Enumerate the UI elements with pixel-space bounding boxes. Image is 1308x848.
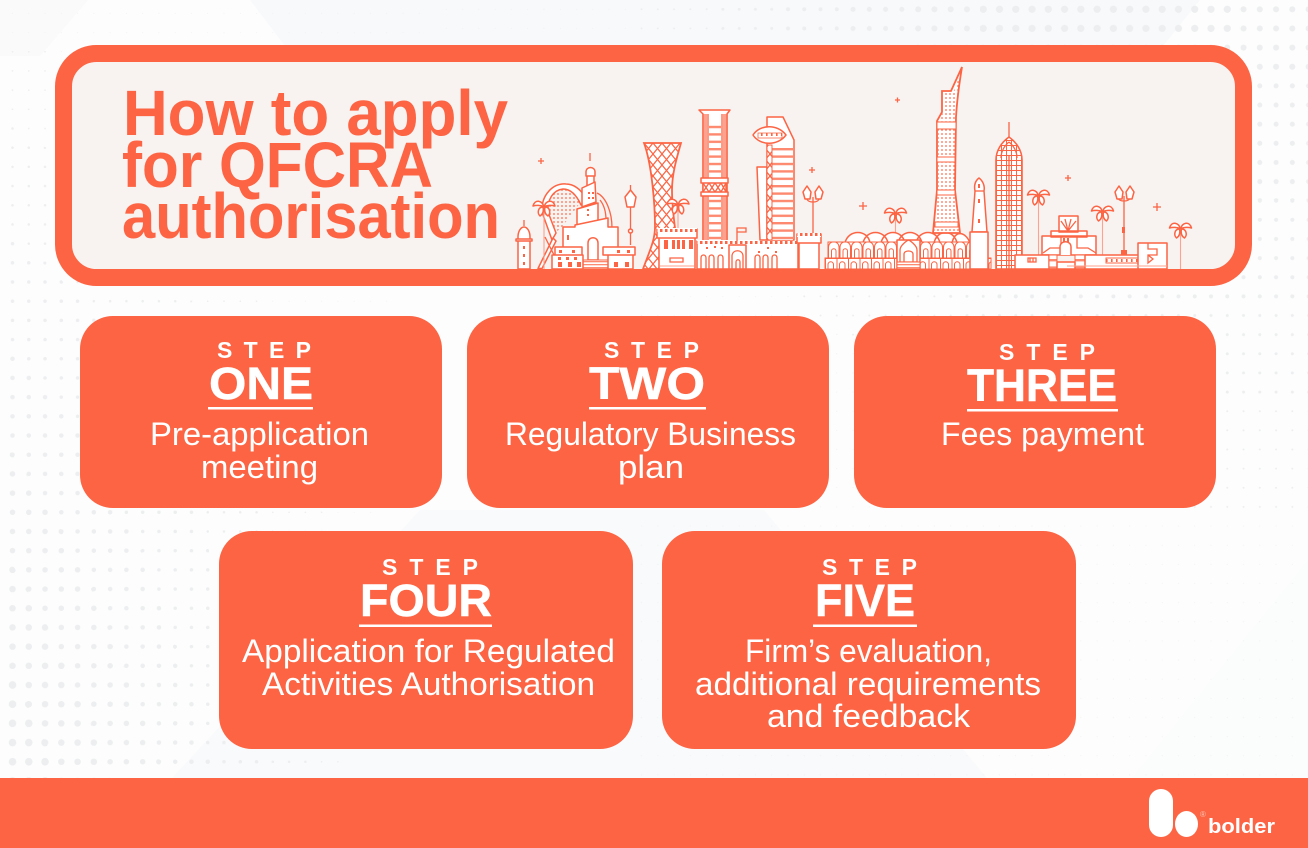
header panel — [64, 54, 1244, 278]
step label: STEP — [822, 554, 917, 580]
arch museum — [538, 184, 612, 268]
glass tower — [996, 122, 1022, 269]
description: meeting — [201, 449, 318, 485]
underline — [208, 407, 313, 410]
description: Regulatory Business — [505, 416, 796, 452]
underline — [813, 624, 917, 627]
step label: STEP — [382, 554, 478, 580]
palm over palace — [884, 208, 906, 233]
panel: step three — [854, 316, 1216, 508]
underline — [967, 409, 1118, 412]
panel: step two — [467, 316, 829, 508]
underline — [589, 407, 706, 410]
description: Pre-application — [150, 416, 369, 452]
step number: FIVE — [815, 575, 915, 626]
spiral minaret mosque — [552, 153, 635, 269]
title: How to apply — [123, 77, 508, 149]
description: Application for Regulated — [242, 633, 615, 669]
title: authorisation — [122, 180, 500, 252]
logo: bolder: ® — [1200, 810, 1206, 819]
palm by museum — [1092, 206, 1114, 255]
museum — [1015, 216, 1167, 269]
palm left — [533, 201, 555, 269]
description: additional requirements — [695, 666, 1041, 702]
logo: bolder — [1149, 789, 1275, 838]
panel: step one — [80, 316, 442, 508]
hotel tower with disc — [753, 117, 794, 240]
step number: TWO — [589, 358, 705, 409]
palm centre — [667, 199, 689, 229]
description — [505, 416, 796, 485]
step number: THREE — [967, 360, 1117, 411]
title — [122, 77, 508, 252]
street lamp 1 — [625, 185, 636, 245]
old minaret — [970, 178, 988, 269]
fort long wall — [697, 228, 798, 269]
street lamp 2 — [803, 186, 823, 234]
illustration: Doha skyline — [516, 67, 1192, 269]
logo: bolder: bolder — [1208, 816, 1275, 838]
footer bar — [0, 778, 1308, 848]
step number: ONE — [209, 358, 313, 409]
description — [695, 633, 1041, 734]
description — [242, 633, 615, 702]
palm far right — [1170, 223, 1192, 269]
palm right of glass tower — [1028, 190, 1050, 255]
step number: FOUR — [360, 575, 492, 626]
description: plan — [618, 449, 684, 485]
description — [150, 416, 369, 485]
lattice tower — [643, 143, 681, 269]
panel: step five — [662, 531, 1076, 749]
description: Fees payment — [941, 416, 1144, 452]
lighthouse — [516, 220, 532, 269]
fort corner tower — [797, 233, 821, 269]
description: Activities Authorisation — [262, 666, 595, 702]
underline — [359, 624, 492, 627]
title: for QFCRA — [122, 129, 433, 201]
tall stepped tower — [699, 110, 730, 241]
step label: STEP — [604, 337, 699, 363]
twisted tower — [933, 67, 962, 233]
panel: step four — [219, 531, 633, 749]
sparkles — [538, 98, 1161, 211]
street lamp 3 — [1115, 186, 1134, 255]
description: and feedback — [767, 698, 971, 734]
step label: STEP — [217, 337, 311, 363]
palace — [825, 232, 991, 269]
fort gatehouse — [657, 228, 697, 269]
step label: STEP — [999, 339, 1095, 365]
description: Firm’s evaluation, — [745, 633, 992, 669]
